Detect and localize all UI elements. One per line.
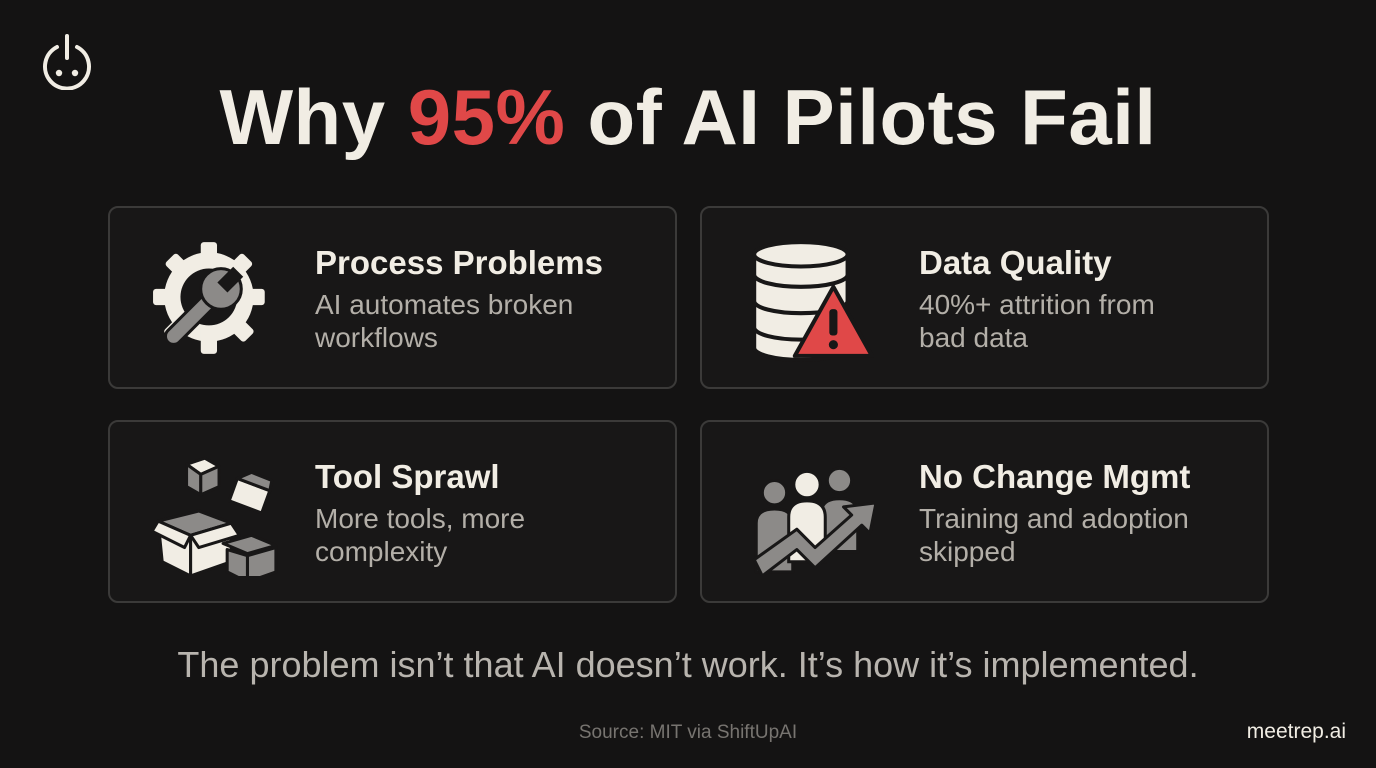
description: More tools, more complexity xyxy=(315,503,525,567)
title: Why 95% of AI Pilots Fail xyxy=(219,73,1157,161)
description: 40%+ attrition from bad data xyxy=(919,289,1155,353)
panel: process problems xyxy=(108,206,677,389)
source note: Source: MIT via ShiftUpAI xyxy=(579,722,797,743)
panel: data quality xyxy=(700,206,1269,389)
description: AI automates broken workflows xyxy=(315,289,573,353)
logo: power icon xyxy=(43,34,91,90)
description: Training and adoption skipped xyxy=(919,503,1189,567)
tagline: The problem isn’t that AI doesn’t work. It’s how it’s implemented. xyxy=(177,644,1199,685)
heading: Data Quality xyxy=(919,244,1112,281)
panel: tool sprawl xyxy=(108,420,677,603)
icon: boxes xyxy=(154,460,274,576)
heading: No Change Mgmt xyxy=(919,458,1190,495)
panel: no change mgmt xyxy=(700,420,1269,603)
brand: meetrep.ai: meetrep.ai xyxy=(1247,720,1346,743)
heading: Tool Sprawl xyxy=(315,458,500,495)
icon: people with rising arrow xyxy=(756,470,874,574)
icon: database with warning xyxy=(756,244,868,358)
heading: Process Problems xyxy=(315,244,603,281)
icon: gear and wrench xyxy=(153,242,265,354)
